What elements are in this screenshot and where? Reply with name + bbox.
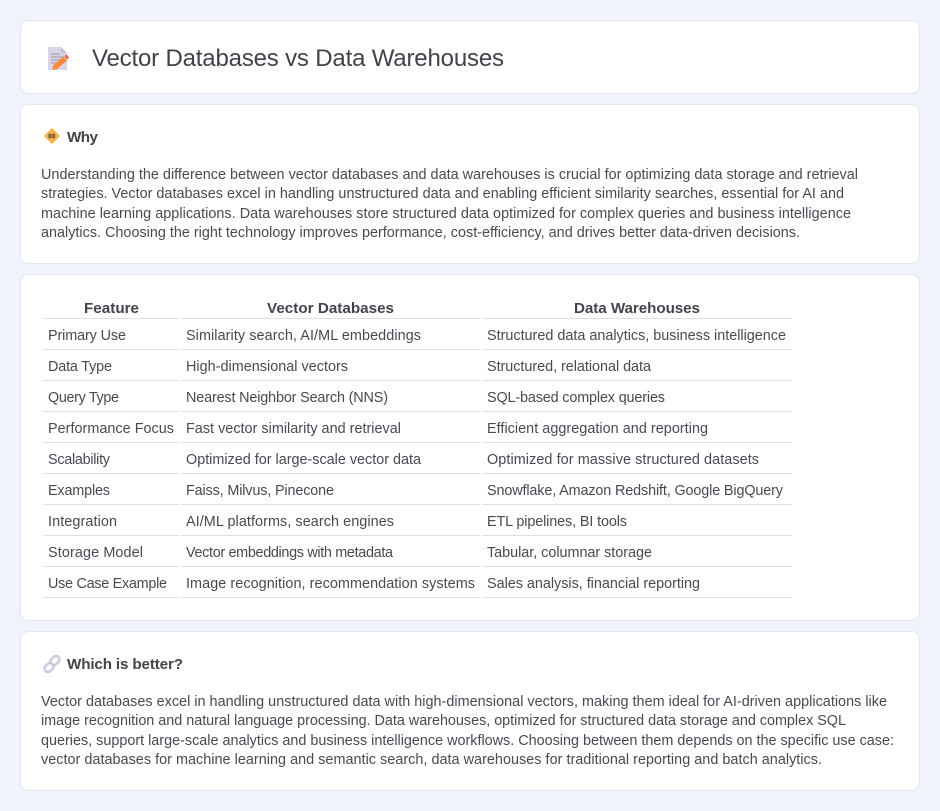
text block: why paragraph: machine learning applications. Data warehouses store structured data optimized for complex queries and business intelligence — [41, 206, 851, 222]
row: examples: Faiss, Milvus, Pinecone — [186, 483, 334, 499]
row: scalability: Scalability — [48, 452, 111, 468]
table header row: Vector Databases — [267, 300, 394, 317]
text block: which is better paragraph: queries, support large-scale analytics and business intelligence workflows. Choosing between them depends on the specific use case: — [41, 733, 894, 749]
row: primary use — [48, 328, 786, 344]
row: storage model: Storage Model — [48, 545, 143, 561]
text block: which is better paragraph: image recognition and natural language processing. Data warehouses, optimized for structured data storage and complex SQL — [41, 713, 846, 729]
panel: header — [20, 20, 920, 94]
row: scalability: Optimized for large-scale vector data — [186, 452, 421, 468]
row: performance focus: Performance Focus — [48, 421, 174, 437]
row: primary use: Structured data analytics, business intelligence — [487, 328, 786, 344]
panel: which is better — [20, 632, 920, 790]
table header row: Data Warehouses — [574, 300, 700, 317]
text block: which is better paragraph: vector databases for machine learning and semantic search, data warehouses for traditional reporting and batch analytics. — [41, 752, 822, 768]
text block: why paragraph — [41, 167, 858, 241]
row: storage model: Tabular, columnar storage — [487, 545, 652, 561]
row: primary use: Primary Use — [48, 328, 126, 344]
row: examples — [48, 483, 784, 499]
panel: why — [20, 104, 920, 264]
row: storage model: Vector embeddings with metadata — [186, 545, 393, 561]
text block: why paragraph: strategies. Vector databases excel in handling unstructured data and enabling efficient similarity searches, essential for AI and — [41, 186, 844, 202]
icon: chain link — [43, 654, 61, 674]
row: examples: Examples — [48, 483, 110, 499]
row: query type: Nearest Neighbor Search (NNS) — [186, 390, 388, 406]
row: scalability: Optimized for massive structured datasets — [487, 452, 759, 468]
row: scalability — [48, 452, 759, 468]
row: data type: Structured, relational data — [487, 359, 651, 375]
icon: document with pencil — [48, 47, 69, 70]
row: integration — [48, 514, 627, 530]
row: use case example: Sales analysis, financial reporting — [487, 576, 700, 592]
row: query type — [48, 390, 665, 406]
row: data type: Data Type — [48, 359, 112, 375]
row: data type: High-dimensional vectors — [186, 359, 348, 375]
row: data type — [48, 359, 651, 375]
text block: which is better paragraph — [41, 694, 894, 768]
row: use case example: Use Case Example — [48, 576, 167, 592]
title: Vector Databases vs Data Warehouses — [92, 45, 504, 72]
row: query type: SQL-based complex queries — [487, 390, 665, 406]
row: use case example — [48, 576, 700, 592]
row: use case example: Image recognition, recommendation systems — [186, 576, 475, 592]
row: storage model — [48, 545, 652, 561]
row: integration: ETL pipelines, BI tools — [487, 514, 627, 530]
row: integration: Integration — [48, 514, 117, 530]
row: examples: Snowflake, Amazon Redshift, Google BigQuery — [487, 483, 784, 499]
row: performance focus: Efficient aggregation and reporting — [487, 421, 708, 437]
row: integration: AI/ML platforms, search engines — [186, 514, 394, 530]
heading: why: Why — [67, 129, 99, 146]
text block: why paragraph: Understanding the difference between vector databases and data warehouses is crucial for optimizing data storage and retrieval — [41, 167, 858, 183]
row: primary use: Similarity search, AI/ML embeddings — [186, 328, 421, 344]
table header row — [84, 300, 700, 317]
panel: comparison table — [20, 274, 920, 620]
text block: which is better paragraph: Vector databases excel in handling unstructured data with high-dimensional vectors, making them ideal for AI-driven applications like — [41, 694, 887, 710]
heading: which is better: Which is better? — [67, 656, 183, 673]
row: query type: Query Type — [48, 390, 119, 406]
table header row: Feature — [84, 300, 139, 317]
row: performance focus — [48, 421, 708, 437]
row: performance focus: Fast vector similarity and retrieval — [186, 421, 401, 437]
text block: why paragraph: analytics. Choosing the right technology improves performance, cost-efficiency, and drives better data-driven decisions. — [41, 225, 800, 241]
icon: warning diamond — [44, 128, 60, 144]
